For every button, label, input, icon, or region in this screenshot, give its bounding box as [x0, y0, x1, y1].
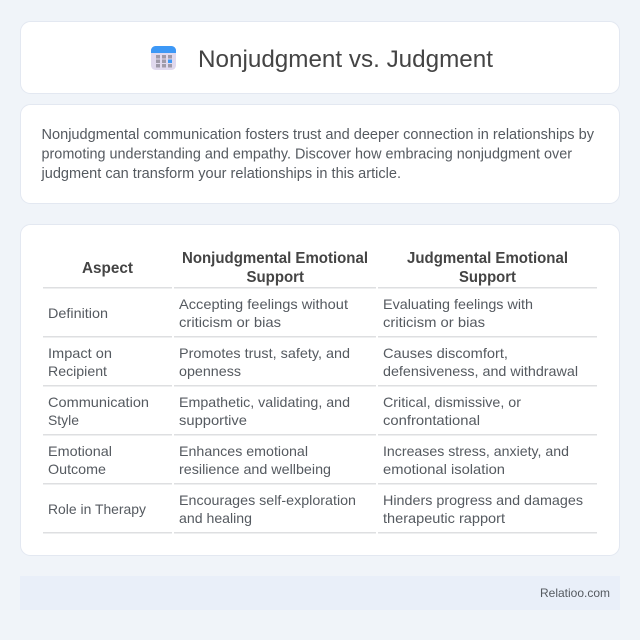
panel: comparison table [20, 224, 620, 556]
row: impact on recipient: Promotes trust, safety, and [179, 345, 350, 361]
row: emotional outcome: emotional isolation [383, 461, 505, 477]
row: impact on recipient [48, 345, 578, 379]
panel: title card [20, 22, 620, 94]
title: Nonjudgment vs. Judgment [198, 46, 493, 73]
row: communication style: Communication [48, 394, 149, 410]
intro text: judgment can transform your relationships in this article. [40, 166, 401, 182]
row: emotional outcome: Increases stress, anxiety, and [383, 443, 569, 459]
row: emotional outcome [48, 443, 569, 477]
row: emotional outcome: resilience and wellbeing [179, 461, 331, 477]
row: impact on recipient: defensiveness, and withdrawal [383, 363, 578, 379]
icon: calendar [151, 46, 176, 70]
row: definition: criticism or bias [383, 314, 485, 330]
intro text: Nonjudgmental communication fosters trust and deeper connection in relationships by [42, 127, 595, 143]
row: communication style: supportive [179, 412, 247, 428]
table header row: Aspect [82, 260, 134, 277]
row: communication style: confrontational [383, 412, 480, 428]
row: impact on recipient: Impact on [48, 345, 112, 361]
row: role in therapy: therapeutic rapport [383, 510, 505, 526]
row: role in therapy: Role in Therapy [48, 501, 146, 517]
row: role in therapy [48, 492, 583, 526]
row: definition: criticism or bias [179, 314, 281, 330]
intro text: promoting understanding and empathy. Discover how embracing nonjudgment over [42, 146, 572, 162]
row: definition: Accepting feelings without [179, 296, 348, 312]
row: role in therapy: Hinders progress and damages [383, 492, 583, 508]
table header row: Judgmental Emotional [407, 250, 568, 267]
row: communication style [48, 394, 521, 428]
row: role in therapy: and healing [179, 510, 252, 526]
row: definition: Definition [48, 305, 108, 321]
row: role in therapy: Encourages self-exploration [179, 492, 356, 508]
row: communication style: Critical, dismissive, or [383, 394, 521, 410]
table header row: Support [459, 269, 517, 286]
table header row: Nonjudgmental Emotional [182, 250, 368, 267]
row: emotional outcome: Emotional [48, 443, 112, 459]
row: impact on recipient: Causes discomfort, [383, 345, 508, 361]
row: communication style: Style [48, 412, 79, 428]
row: communication style: Empathetic, validating, and [179, 394, 350, 410]
row: definition [48, 296, 533, 330]
row: definition: Evaluating feelings with [383, 296, 533, 312]
intro text [40, 127, 595, 182]
row: emotional outcome: Outcome [48, 461, 106, 477]
table header row: Support [246, 269, 305, 286]
panel: introduction [20, 104, 620, 204]
footer [20, 576, 620, 610]
row: impact on recipient: Recipient [48, 363, 107, 379]
footer: Relatioo.com [540, 586, 610, 600]
table header row [82, 250, 568, 286]
row: impact on recipient: openness [179, 363, 241, 379]
row: emotional outcome: Enhances emotional [179, 443, 308, 459]
